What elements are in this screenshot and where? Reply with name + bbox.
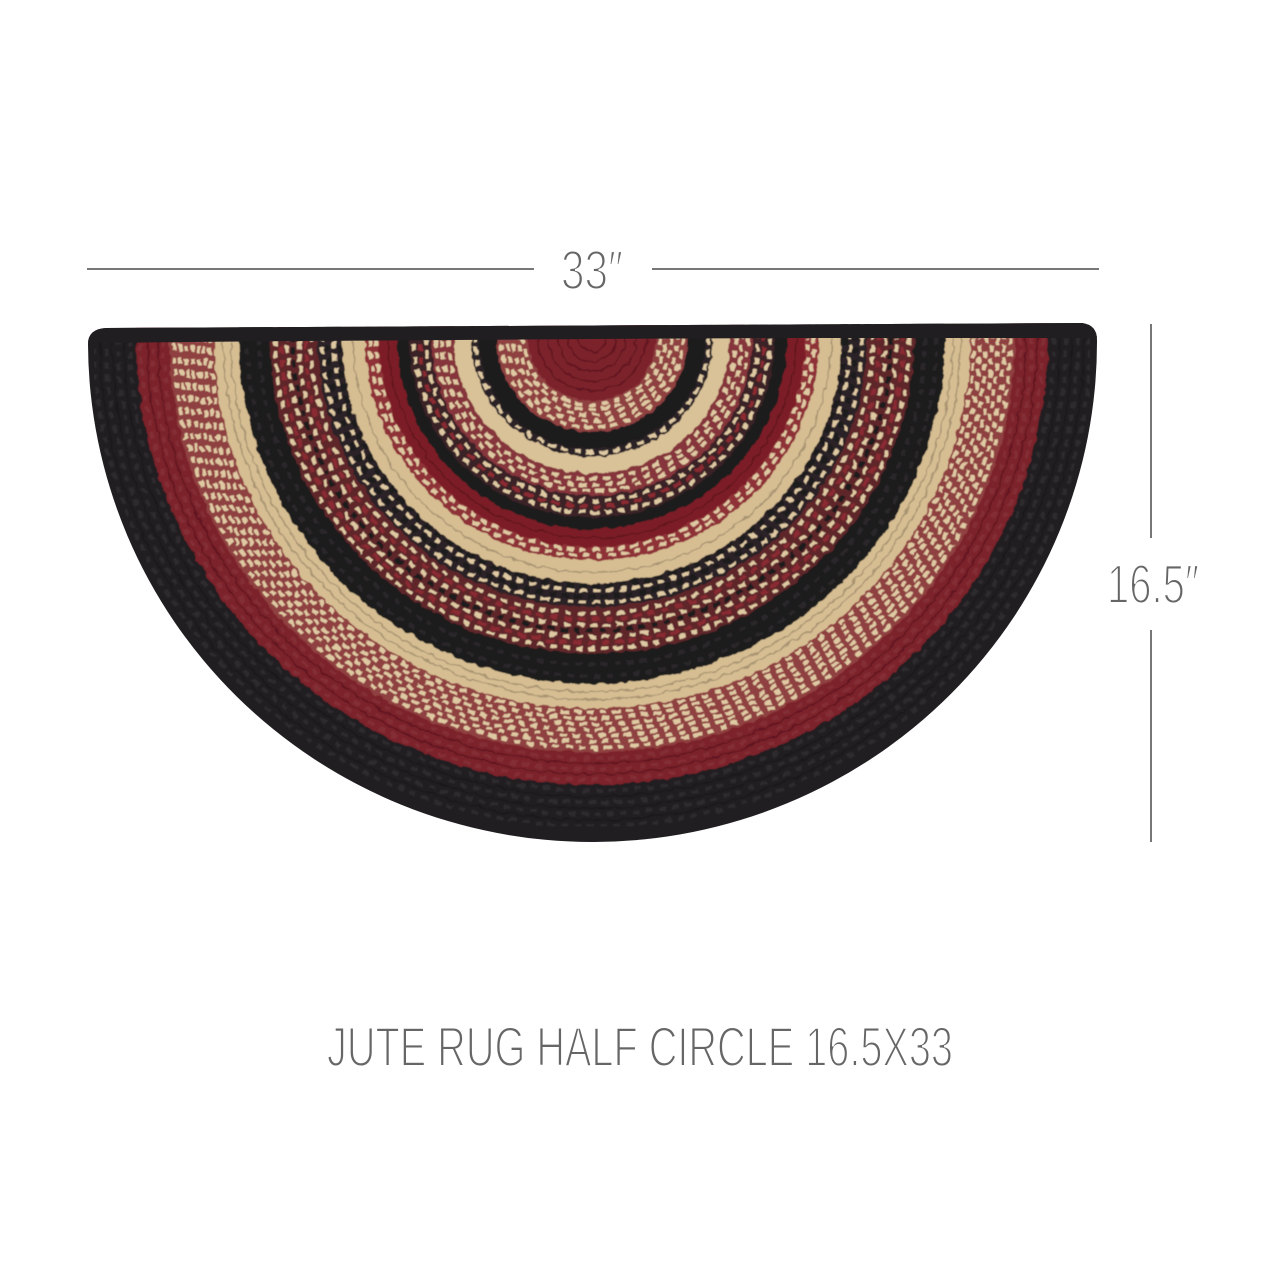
height dimension: 16.5 inches: 16.5″ — [1107, 553, 1199, 615]
ring: cream band — [213, 324, 972, 711]
ring: inner solid red band — [378, 338, 806, 548]
ring: black band — [238, 324, 947, 686]
ring: red and cream braid — [168, 323, 1016, 754]
ring: thin red and cream braid — [364, 324, 820, 562]
ring: dark braid — [408, 324, 776, 519]
outer black band strands — [94, 338, 1090, 826]
ring: black and cream braid — [316, 324, 868, 609]
ring: dark red, black and cream braid — [269, 324, 916, 655]
ring: inner black band — [396, 324, 788, 531]
ring: narrow cream band — [453, 324, 731, 476]
half circle braided rug — [88, 323, 1097, 842]
top black binding strip — [88, 323, 1097, 343]
ring: mid red and cream braid — [430, 324, 754, 497]
ring: centre red and cream braid — [495, 325, 689, 434]
ring: narrow black and cream braid — [470, 324, 714, 458]
ring: inner cream band — [340, 324, 843, 586]
centre: solid red spiral — [528, 325, 657, 402]
ring: solid red band — [134, 323, 1050, 786]
ring: centre black band — [479, 338, 705, 448]
width dimension: 33 inches: 33″ — [561, 239, 623, 301]
product caption: JUTE RUG HALF CIRCLE 16.5X33 — [327, 1015, 953, 1078]
